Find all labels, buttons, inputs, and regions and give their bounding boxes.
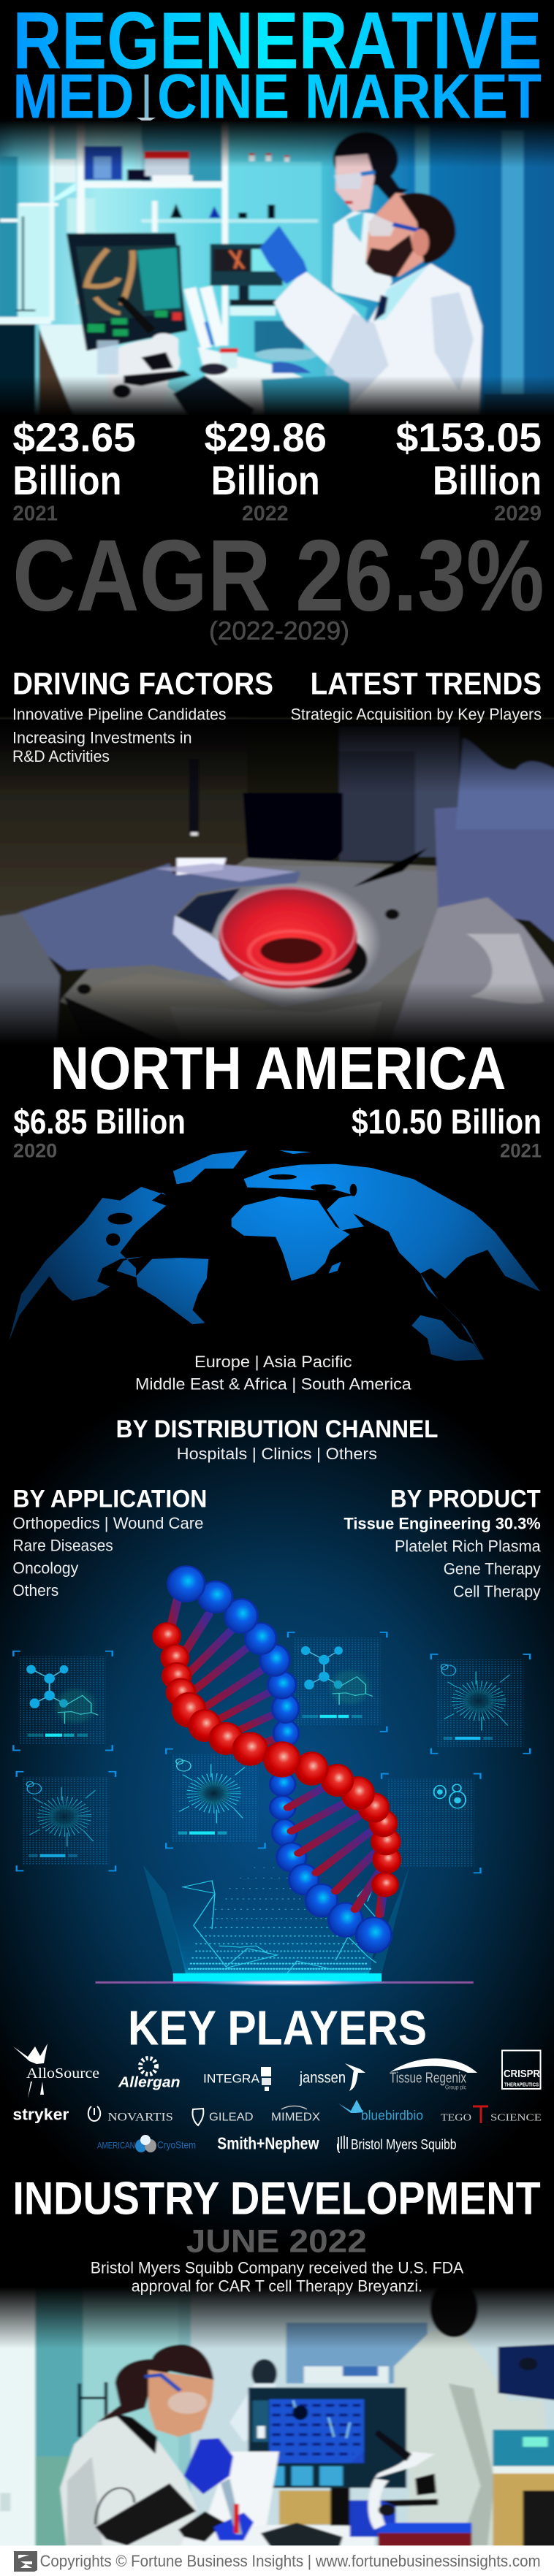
stat 2022: $29.86 [205,414,327,460]
driving factors: Increasing Investments in [12,729,192,746]
DNA rungs lower [288,1786,384,1914]
hologram particles [189,1868,371,1969]
logo: Novartis: NOVARTIS [107,2111,173,2123]
logo: Tego Science: TEGO [441,2112,471,2123]
driving factors: R&D Activities [12,747,110,765]
logo: Janssen [299,2063,365,2091]
photo fade bottom [0,376,554,416]
logo: CRISPR Therapeutics [502,2051,541,2089]
by distribution channel: Hospitals | Clinics | Others [177,1445,377,1463]
by product: Platelet Rich Plasma [395,1537,541,1556]
logo: MiMedx: MIMEDX [271,2111,320,2123]
photo fade bottom [0,982,554,1044]
photo: scientists in laboratory [0,115,554,434]
regions list: Middle East & Africa | South America [135,1375,411,1394]
by application: Oncology [12,1559,78,1577]
logo: Bristol Myers Squibb: Bristol Myers Squibb [351,2138,456,2153]
stat 2022: Billion [211,457,320,503]
HUD panel: virus right [431,1654,530,1754]
by application: Rare Diseases [12,1537,113,1555]
market size stats [12,414,542,526]
by distribution channel: BY DISTRIBUTION CHANNEL [116,1415,439,1443]
logo: Tego Science: SCIENCE [490,2112,542,2123]
north america 2020 [13,1102,186,1162]
latest trends [291,667,542,724]
hologram beam [143,1865,410,1981]
HUD panel: virus left [17,1772,115,1870]
DNA illustration [13,1566,530,1987]
driving factors [12,667,273,765]
title [12,0,542,131]
stat 2021 [12,414,136,526]
shelves [0,121,318,345]
logo: American CryoStem: AMERICAN [97,2141,135,2151]
stat 2022: 2022 [242,502,289,526]
HUD panel: cells [382,1774,480,1873]
objective and microscope body [339,727,459,857]
driving factors: Innovative Pipeline Candidates [12,706,227,724]
key players heading: KEY PLAYERS [128,2000,427,2055]
glow line [173,1973,382,1981]
company logos [12,2044,542,2153]
DNA blue strand upper [168,1566,299,1746]
DNA rungs upper [170,1589,284,1743]
woman [332,211,392,302]
Eurasia [244,1164,541,1292]
Arctic isles [279,1150,311,1154]
stat 2029: Billion [433,457,542,503]
logo: AlloSource [13,2044,99,2098]
logo: Bristol Myers Squibb [338,2136,456,2153]
photo: gloved hand with petri dish [0,717,554,1046]
radial background glow behind DNA [0,1366,554,2242]
man [274,264,482,429]
logo: Stryker: stryker [12,2106,69,2124]
north america heading: NORTH AMERICA [50,1034,506,1102]
North America [9,1187,166,1341]
by application: BY APPLICATION [12,1486,207,1513]
photo: scientist with pipette [0,2279,554,2554]
photo fade top [0,2287,554,2349]
South America [136,1258,208,1324]
by product: Tissue Engineering 30.3% [344,1515,541,1533]
logo: Allergan [118,2058,181,2090]
HUD panel: molecule right [288,1632,387,1732]
Australia [411,1315,484,1361]
logo: CRISPR Therapeutics: CRISPR [504,2068,540,2080]
HUD panel: virus center [166,1749,265,1848]
Greenland [173,1150,247,1184]
logo: AlloSource: AlloSource [26,2065,99,2082]
stat 2021: 2021 [12,502,58,526]
logo: Tissue Regenix: Tissue Regenix [390,2071,466,2087]
photo top mask [0,2264,554,2288]
north america 2021 [352,1102,542,1162]
monitor [248,2388,406,2488]
left bench [0,317,51,324]
right arm and glove [435,800,554,960]
photo fade top [0,120,554,167]
main monitor [67,233,187,351]
Africa [232,1196,350,1281]
background man [394,2328,546,2554]
by application: Others [12,1581,58,1600]
title: MED [12,61,134,131]
title: I [143,61,151,131]
by product: Cell Therapy [453,1582,541,1600]
woman [60,2411,198,2554]
date: JUNE 2022 [186,2223,367,2259]
pipettes and microscope [183,286,226,350]
DNA blue strand lower [270,1773,392,1953]
development description: approval for CAR T cell Therapy Breyanzi. [132,2277,422,2295]
logo: Smith and Nephew: Smith+Nephew [217,2134,319,2153]
petri dish [268,931,368,989]
by application: Orthopedics | Wound Care [12,1514,204,1532]
latest trends: Strategic Acquisition by Key Players [291,706,542,724]
photo fade top [0,719,554,792]
desk [177,2525,374,2554]
regions list [135,1353,411,1394]
logo: Tissue Regenix: Group plc [445,2084,466,2091]
stat 2029: $153.05 [396,414,542,460]
logo: Allergan: Allergan [118,2074,181,2090]
rack and microscope [350,2500,395,2537]
hand [18,863,300,981]
stat 2021: $23.65 [12,414,136,460]
logo: Integra [203,2067,271,2091]
logo: Tego Science [441,2106,542,2123]
by product: BY PRODUCT [390,1486,541,1513]
development description: Bristol Myers Squibb Company received the U.S. FDA [91,2258,463,2277]
logo: MiMedx [271,2106,320,2123]
Indonesia islands [420,1274,484,1359]
logo: Integra: INTEGRA [203,2072,260,2086]
logo: American CryoStem: CryoStem [157,2139,196,2151]
logo: Gilead: GILEAD [209,2111,254,2123]
logo: Gilead [192,2109,254,2125]
logo: Janssen: janssen [299,2070,346,2087]
globe map [9,1150,541,1361]
north america 2020: $6.85 Billion [13,1102,186,1141]
logo: bluebird bio: bluebirdbio [361,2109,423,2123]
icon: Fortune Business Insights logo [14,2551,37,2572]
stat 2029 [396,414,542,526]
logo: Tissue Regenix [390,2058,477,2091]
small monitor [210,244,283,286]
north america 2021: 2021 [500,1140,542,1162]
by product: Gene Therapy [444,1559,541,1578]
by distribution channel [116,1415,439,1463]
HUD panel: molecule left [13,1651,113,1750]
logo: American CryoStem [97,2135,196,2152]
logo: Novartis [88,2106,173,2123]
stat 2029: 2029 [494,502,542,526]
stat 2021: Billion [12,457,121,503]
stage [60,858,438,1044]
north america 2020: 2020 [13,1140,57,1162]
footer bar [0,2545,554,2576]
Madagascar [329,1261,341,1274]
DNA red strand [153,1623,401,1896]
development description [91,2258,463,2295]
logo: bluebird bio [338,2100,423,2123]
logo: CRISPR Therapeutics: THERAPEUTICS [504,2083,539,2087]
regions list: Europe | Asia Pacific [194,1353,352,1371]
sleeve and gloves [96,2483,196,2545]
by product [344,1486,541,1600]
stat 2022 [205,414,327,526]
by application [12,1486,207,1600]
CAGR period: (2022-2029) [209,617,349,646]
driving factors: DRIVING FACTORS [12,667,273,702]
